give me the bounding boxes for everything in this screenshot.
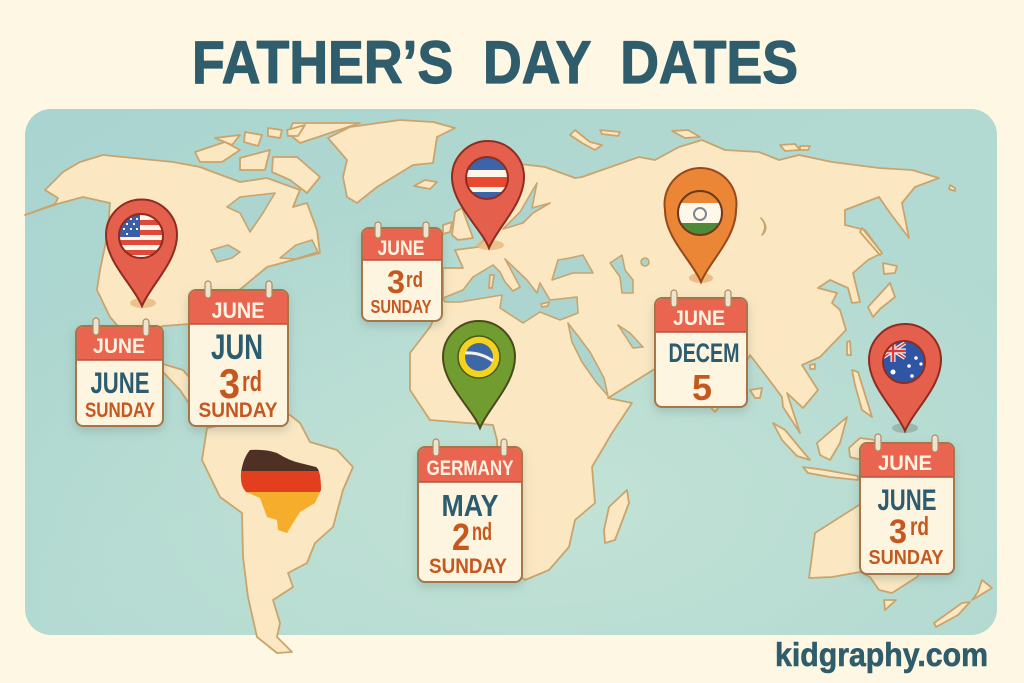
calendar: Europe 3rd Sunday: rd	[406, 267, 423, 292]
flag: USA	[120, 215, 162, 257]
panel: world map	[25, 109, 997, 653]
calendar: Germany May 2nd Sunday: nd	[472, 518, 492, 546]
pin: Brazil	[443, 321, 515, 428]
calendar: India December	[655, 290, 747, 408]
calendar: Germany May 2nd Sunday: 2	[452, 517, 470, 559]
pin: United States	[106, 199, 177, 308]
calendar: June Sunday: JUNE	[93, 335, 145, 358]
land: North America	[25, 155, 320, 340]
calendar: Australia 3rd Sunday: SUNDAY	[868, 547, 944, 569]
calendar: Jun 3rd Sunday: rd	[242, 366, 262, 398]
pin: Australia	[869, 324, 941, 433]
calendar: Europe 3rd Sunday: JUNE	[378, 237, 424, 260]
land: Mediterranean islands	[489, 275, 549, 307]
calendar: Australia 3rd Sunday: rd	[910, 511, 929, 541]
flag: India	[679, 203, 721, 234]
calendar: Australia 3rd Sunday: JUNE	[878, 452, 932, 475]
calendar: Germany May 2nd Sunday: MAY	[442, 488, 499, 523]
calendar: Jun 3rd Sunday	[189, 281, 288, 426]
calendar: Jun 3rd Sunday: JUN	[211, 328, 263, 367]
ocean background	[25, 109, 997, 635]
calendar: Germany May 2nd Sunday: SUNDAY	[429, 555, 507, 578]
calendar: June Sunday: JUNE	[90, 367, 150, 400]
title: FATHER’S DAY DATES	[192, 29, 798, 96]
calendar: Jun 3rd Sunday: 3	[219, 360, 240, 407]
calendar: Jun 3rd Sunday: SUNDAY	[198, 399, 278, 422]
flag-shaped country: Germany flag over South America	[240, 450, 321, 533]
calendar: June Sunday: SUNDAY	[85, 399, 155, 422]
land: Greenland	[328, 120, 455, 203]
land: Iceland	[414, 180, 437, 189]
flag: Brazil	[458, 336, 500, 378]
calendar: Europe 3rd Sunday: 3	[387, 264, 405, 300]
calendar: India December: 5	[692, 367, 712, 408]
land: New Zealand	[934, 580, 992, 627]
land: Central America	[163, 364, 200, 420]
pin: India	[664, 168, 736, 283]
land: Afro-Eurasia	[410, 140, 939, 580]
land: Asian islands	[570, 130, 955, 480]
website credit: kidgraphy.com	[775, 636, 988, 673]
calendar: India December: JUNE	[673, 307, 725, 330]
land: South America	[202, 415, 353, 653]
flag: Australia	[884, 342, 924, 382]
pin: Europe	[452, 141, 524, 250]
land: Arctic islands	[195, 123, 360, 193]
calendar: Europe 3rd Sunday	[362, 222, 442, 321]
calendar: Australia 3rd Sunday	[860, 434, 954, 574]
land: British Isles	[443, 208, 473, 240]
calendar: Australia 3rd Sunday: JUNE	[878, 484, 936, 517]
flag: Europe stripes	[467, 158, 507, 198]
land: Tasmania	[884, 600, 896, 610]
calendar: Germany May 2nd Sunday	[418, 439, 522, 582]
land: Madagascar	[604, 490, 629, 543]
calendar: Jun 3rd Sunday: JUNE	[212, 298, 264, 323]
land: Australia	[809, 495, 930, 593]
calendar: Europe 3rd Sunday: SUNDAY	[370, 297, 432, 317]
calendar: Germany May 2nd Sunday: GERMANY	[426, 457, 514, 480]
calendar: June Sunday	[76, 318, 163, 426]
calendar: Australia 3rd Sunday: 3	[889, 513, 907, 551]
calendar: India December: DECEM	[668, 338, 740, 368]
